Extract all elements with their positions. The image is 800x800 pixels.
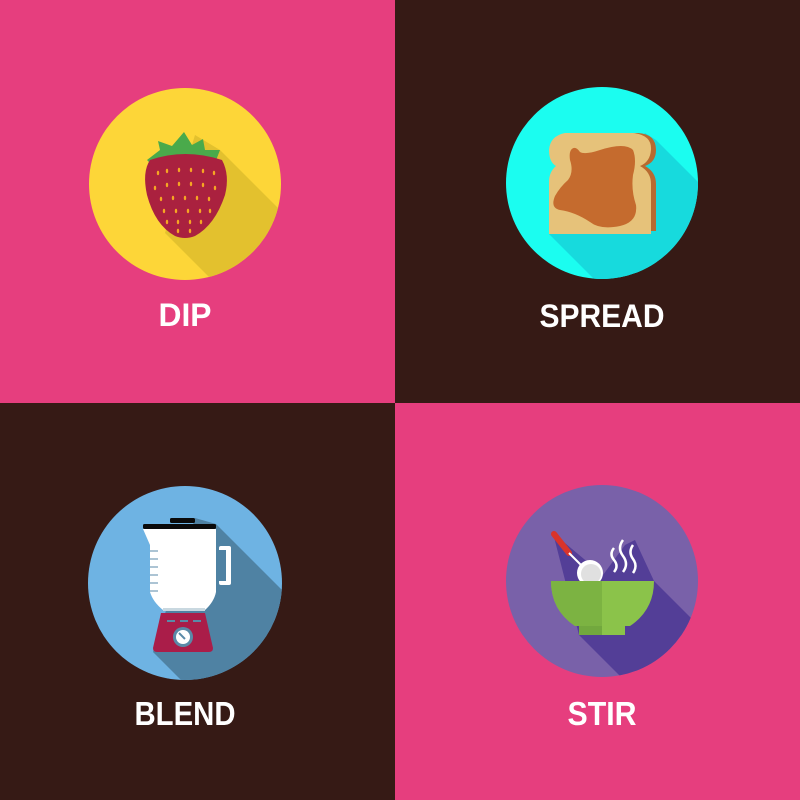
heading: STIR: STIR <box>568 695 637 732</box>
icon: toast with spread <box>506 87 698 279</box>
icon: strawberry <box>89 88 281 280</box>
panel: dip background <box>0 0 395 403</box>
heading: BLEND: BLEND <box>134 695 236 732</box>
heading: DIP: DIP <box>158 297 212 333</box>
icon: bowl with spoon <box>506 485 698 677</box>
panel: spread background <box>395 0 800 403</box>
panel: stir background <box>395 403 800 800</box>
icon: blender <box>88 486 282 680</box>
heading: SPREAD: SPREAD <box>540 298 664 334</box>
panel: blend background <box>0 403 395 800</box>
